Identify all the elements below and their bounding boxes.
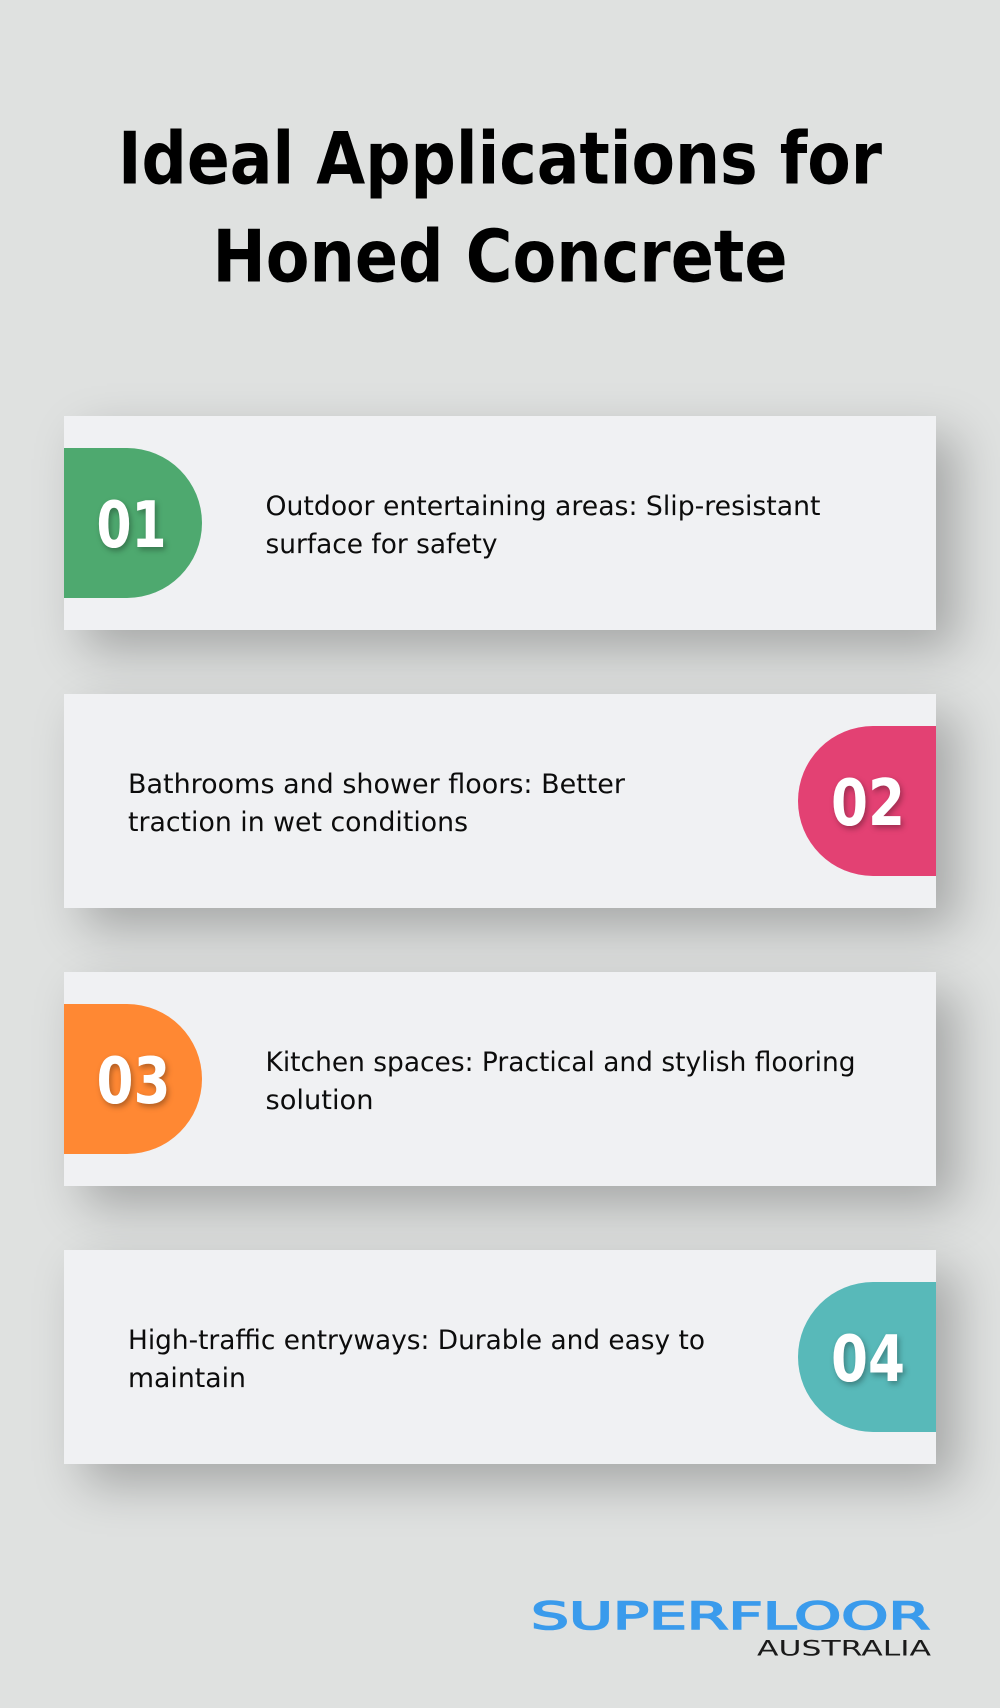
text: card 01 description: Outdoor entertaining areas: Slip-resistant — [266, 491, 820, 522]
text: card 02 description: Bathrooms and shower floors: Better — [128, 769, 626, 800]
text: card 02 description — [128, 769, 626, 838]
logo: Superfloor Australia: AUSTRALIA — [757, 1636, 932, 1660]
text: card 04 description: High-traffic entryways: Durable and easy to — [128, 1325, 705, 1356]
text: card 02 description: traction in wet conditions — [128, 807, 468, 838]
panel: card 04 high-traffic entryways — [64, 1250, 936, 1464]
badge 03: 03 — [96, 1045, 170, 1119]
logo: Superfloor Australia — [531, 1595, 932, 1660]
panel: card 03 kitchen spaces — [64, 972, 936, 1186]
logo: Superfloor Australia: SUPERFLOOR — [531, 1595, 930, 1638]
title: Honed Concrete — [212, 214, 788, 298]
text: card 04 description — [128, 1325, 705, 1394]
panel: card 01 outdoor entertaining areas — [64, 416, 936, 630]
badge 02 — [798, 726, 936, 876]
badge 02: 02 — [831, 767, 905, 841]
text: card 03 description: solution — [266, 1085, 374, 1116]
badge 01 — [64, 448, 202, 598]
badge 04 — [798, 1282, 936, 1432]
badge 03 — [64, 1004, 202, 1154]
title: Ideal Applications for — [118, 116, 882, 200]
badge 01: 01 — [96, 489, 166, 563]
panel: card 02 bathrooms and shower floors — [64, 694, 936, 908]
text: card 04 description: maintain — [128, 1363, 246, 1394]
text: card 03 description — [266, 1047, 856, 1116]
badge 04: 04 — [831, 1323, 905, 1397]
text: card 01 description — [266, 491, 820, 560]
title — [118, 116, 882, 298]
text: card 01 description: surface for safety — [266, 529, 498, 560]
text: card 03 description: Kitchen spaces: Practical and stylish flooring — [266, 1047, 856, 1078]
